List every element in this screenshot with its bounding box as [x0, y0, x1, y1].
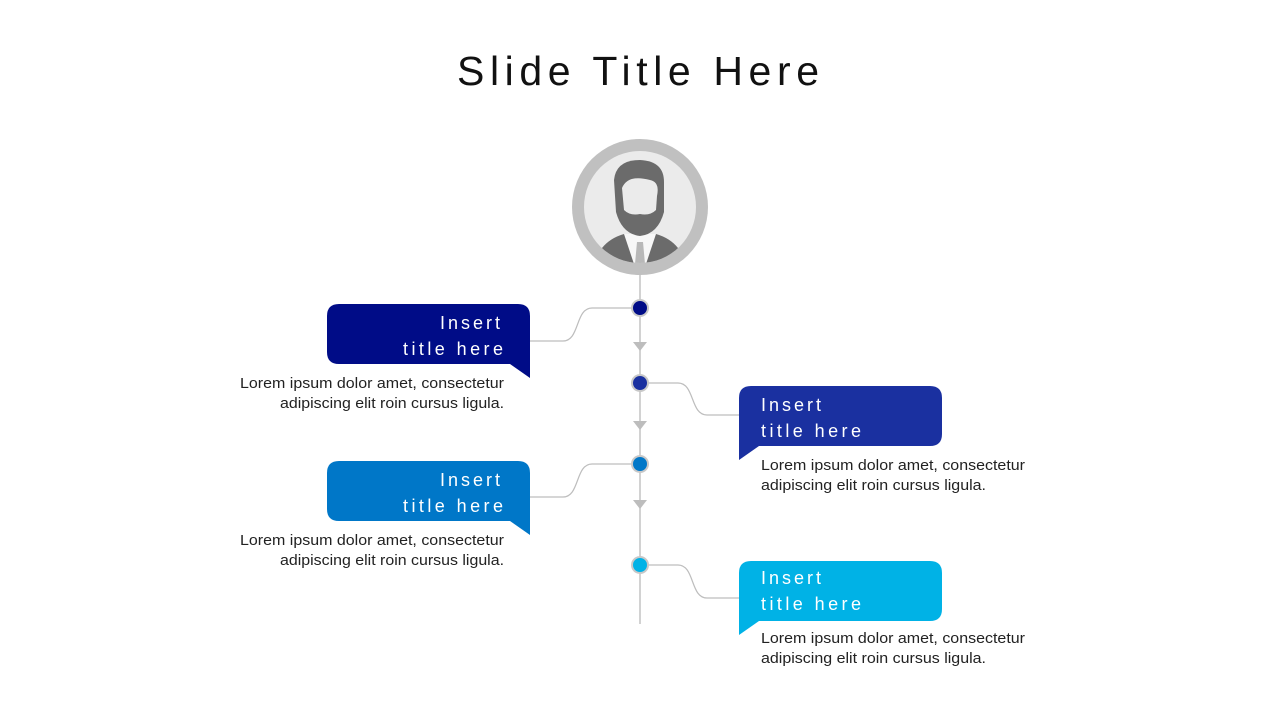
step 2 bubble: title here [761, 421, 861, 441]
step 3 text: adipiscing elit roin cursus ligula. [280, 552, 504, 569]
step 1 bubble: title here [403, 339, 503, 359]
step 2 bubble: Insert [761, 395, 824, 415]
step 4 text: adipiscing elit roin cursus ligula. [761, 650, 986, 667]
icon: avatar [572, 139, 708, 275]
step 2 text: Lorem ipsum dolor amet, consectetur [761, 457, 1025, 474]
step 1 bubble [327, 304, 530, 378]
step 2 bubble [739, 386, 942, 460]
step 4 bubble: Insert [761, 568, 824, 588]
step 3 bubble [327, 461, 530, 535]
arrows [633, 342, 647, 509]
step 1 text: Lorem ipsum dolor amet, consectetur [240, 375, 504, 392]
step 1 text: adipiscing elit roin cursus ligula. [280, 395, 504, 412]
timeline line [639, 272, 641, 624]
step 1 bubble: Insert [440, 313, 503, 333]
step 4 bubble: title here [761, 594, 861, 614]
dots [632, 300, 648, 573]
step 2 text [761, 457, 1025, 494]
step 4 bubble [739, 561, 942, 635]
step 2 text: adipiscing elit roin cursus ligula. [761, 477, 986, 494]
step 3 text [240, 532, 504, 569]
step 4 text: Lorem ipsum dolor amet, consectetur [761, 630, 1025, 647]
step 1 text [240, 375, 504, 412]
connectors [530, 308, 739, 598]
step 4 text [761, 630, 1025, 667]
step 3 text: Lorem ipsum dolor amet, consectetur [240, 532, 504, 549]
step 3 bubble: title here [403, 496, 503, 516]
step 3 bubble: Insert [440, 470, 503, 490]
title: Slide Title Here [457, 48, 819, 94]
